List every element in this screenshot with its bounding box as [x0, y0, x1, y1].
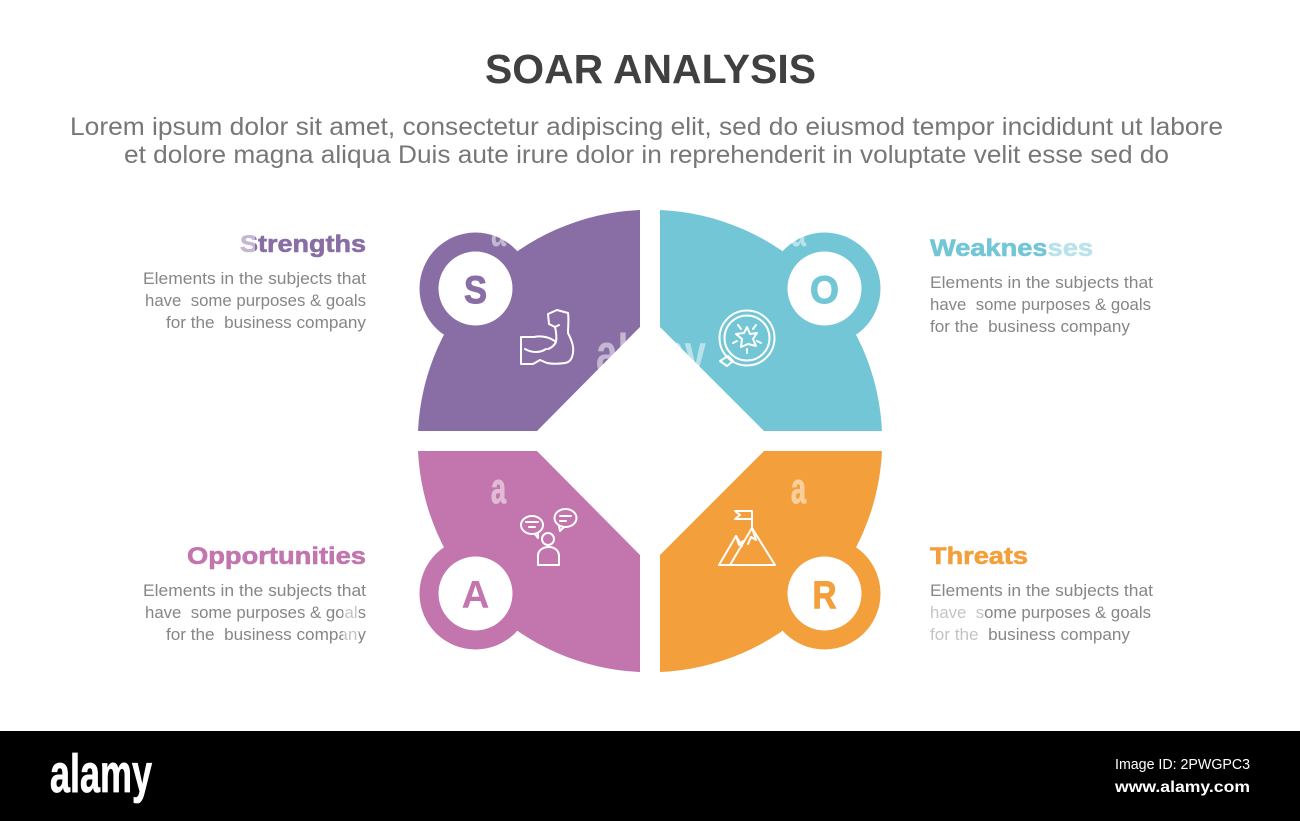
footer url: www.alamy.com	[1114, 779, 1250, 796]
text block: threats: Elements in the subjects that	[930, 581, 1153, 600]
letter O: O	[810, 269, 839, 312]
text block: threats: for the business company	[930, 625, 1130, 644]
watermark marks: alamy	[596, 322, 706, 384]
letter S: S	[464, 269, 487, 312]
watermark marks: a	[491, 208, 507, 256]
watermark fades over text	[239, 232, 1094, 644]
text block: threats: have some purposes & goals	[930, 603, 1151, 622]
icon: star in lens	[720, 310, 774, 366]
subtitle text	[70, 113, 1223, 169]
text block: weaknesses	[930, 235, 1153, 336]
panel: opportunities segment	[418, 451, 640, 672]
text block: weaknesses: for the business company	[930, 317, 1130, 336]
panel: strengths segment	[418, 210, 640, 431]
watermark marks: a	[491, 465, 507, 513]
panel: threats segment	[660, 451, 882, 672]
text block: opportunities: Elements in the subjects that	[143, 581, 366, 600]
letter A: A	[462, 574, 490, 617]
footer logo: alamy	[50, 744, 152, 804]
icon: flexed arm	[521, 310, 573, 364]
watermark marks: a	[791, 465, 807, 513]
watermark marks	[491, 208, 807, 513]
text block: opportunities: for the business company	[166, 625, 366, 644]
text block: strengths: Elements in the subjects that	[143, 269, 366, 288]
subtitle text: et dolore magna aliqua Duis aute irure dolor in reprehenderit in voluptate velit esse sed do	[124, 141, 1169, 169]
text block: strengths: have some purposes & goals	[145, 291, 366, 310]
watermark marks: a	[791, 208, 807, 256]
text block: weaknesses: Elements in the subjects that	[930, 273, 1153, 292]
footer image id: Image ID: 2PWGPC3	[1115, 756, 1250, 773]
icon: person with speech bubbles	[521, 509, 576, 565]
text block: strengths: Strengths	[240, 231, 366, 258]
text block: opportunities: Opportunities	[187, 543, 366, 570]
text block: opportunities: have some purposes & goals	[145, 603, 366, 622]
footer bar	[0, 731, 1300, 821]
text block: strengths	[143, 231, 366, 332]
text block: weaknesses: Weaknesses	[930, 235, 1093, 262]
text block: opportunities	[143, 543, 366, 644]
title: SOAR ANALYSIS	[485, 46, 816, 92]
text block: strengths: for the business company	[166, 313, 366, 332]
text block: threats	[930, 543, 1153, 644]
panel: weaknesses segment	[660, 210, 882, 431]
subtitle text: Lorem ipsum dolor sit amet, consectetur adipiscing elit, sed do eiusmod tempor incididunt ut labore	[70, 113, 1223, 141]
text block: threats: Threats	[930, 543, 1028, 570]
icon: mountain with flag	[719, 511, 775, 565]
letter R: R	[812, 574, 836, 617]
text block: weaknesses: have some purposes & goals	[930, 295, 1151, 314]
